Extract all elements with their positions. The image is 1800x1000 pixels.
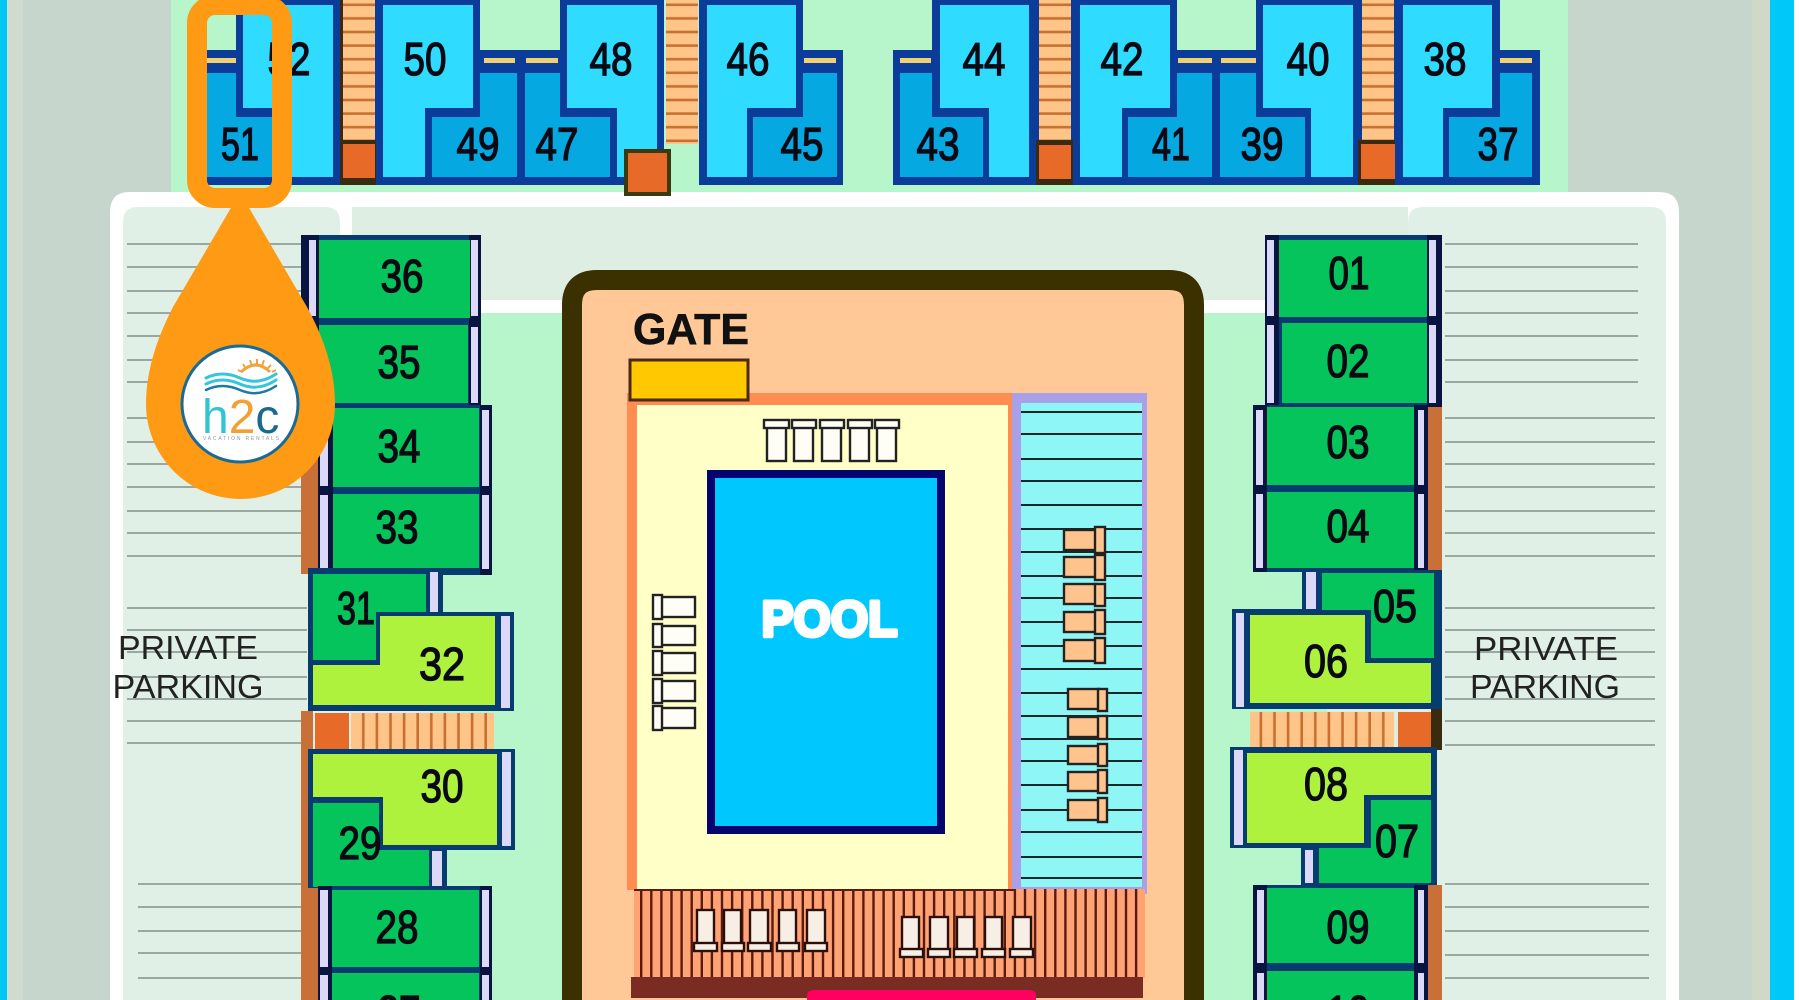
units 28 and 27 (301, 886, 492, 1000)
units 30 and 29 (301, 749, 515, 1000)
left column of units (301, 235, 515, 1000)
right loungers lower group (1068, 689, 1107, 822)
units 48 and 47: 48 (590, 33, 632, 85)
units 01 and 02: 01 (1328, 247, 1370, 299)
units 40 and 39: 40 (1286, 33, 1330, 85)
units 09 and 10 (1253, 885, 1442, 1000)
wordmark: h2c (202, 391, 279, 444)
gate label: GATE (633, 305, 749, 354)
units 34 and 33: 34 (378, 420, 420, 472)
units 08 and 07: 08 (1304, 758, 1348, 810)
units 28 and 27: 28 (376, 901, 418, 953)
units 36 and 35: 35 (378, 336, 420, 388)
units 52 and 51: 52 (268, 33, 310, 85)
units 32 and 31: 32 (419, 638, 465, 690)
units 08 and 07 (1230, 747, 1437, 885)
units 50 and 49: 50 (404, 33, 446, 85)
units 30 and 29: 29 (338, 817, 382, 869)
label: private parking left (112, 629, 264, 705)
location pin highlighting unit 51 (146, 5, 335, 499)
top loungers (764, 420, 899, 461)
pool enclosure (572, 280, 1194, 1000)
left parking area (123, 207, 352, 1000)
grounds with white kerb (110, 192, 1679, 1000)
units 40 and 39 (1216, 0, 1362, 185)
swimming pool: POOL (762, 591, 898, 647)
pool terrace (627, 393, 1019, 890)
left stair (301, 711, 494, 754)
units 42 and 41: 42 (1100, 33, 1144, 85)
units 36 and 35 (301, 235, 481, 407)
top row of units (192, 0, 1540, 194)
label: private parking right (1470, 630, 1620, 705)
units 09 and 10: 09 (1326, 901, 1370, 953)
h2c logo (182, 346, 298, 462)
left loungers (653, 595, 695, 730)
gate (630, 360, 748, 400)
units 38 and 37: 38 (1424, 33, 1466, 85)
units 32 and 31: 31 (337, 582, 375, 634)
sun (238, 359, 276, 372)
units 03 and 04: 03 (1326, 416, 1370, 468)
units 48 and 47 (518, 0, 664, 185)
upper lawn (171, 0, 1568, 194)
units 44 and 43: 44 (962, 33, 1006, 85)
units 01 and 02: 02 (1326, 335, 1370, 387)
units 01 and 02 (1265, 235, 1442, 407)
enclosure wall (572, 280, 1194, 1000)
units 06 and 05: 05 (1373, 580, 1417, 632)
units 06 and 05 (1232, 570, 1442, 709)
units 52 and 51 (192, 0, 340, 185)
units 46 and 45: 45 (780, 118, 824, 170)
units 38 and 37 (1395, 0, 1540, 185)
right parking area (1408, 207, 1666, 1000)
garden strips beside pool enclosure (430, 300, 1327, 1000)
stair 4 (1358, 0, 1403, 185)
units 32 and 31 (308, 568, 514, 711)
right loungers upper group (1064, 527, 1105, 663)
right column of units (1230, 235, 1442, 1000)
units 03 and 04: 04 (1326, 500, 1370, 552)
label: private parking left: PARKING (112, 668, 264, 705)
teardrop (146, 206, 335, 499)
units 42 and 41: 41 (1152, 118, 1190, 170)
units 34 and 33: 33 (376, 501, 418, 553)
shaded lounge deck (1012, 393, 1147, 894)
units 52 and 51: 51 (221, 118, 259, 170)
label: private parking left: PRIVATE (118, 629, 258, 666)
units 50 and 49 (376, 0, 525, 185)
timber deck (631, 889, 1145, 998)
right stair (1250, 709, 1442, 750)
deck loungers right group (900, 917, 1033, 957)
tagline: VACATION RENTALS (203, 436, 280, 442)
deck loungers left group (694, 910, 827, 951)
highlight ring (197, 5, 282, 198)
units 40 and 39: 39 (1240, 118, 1284, 170)
waves (206, 374, 276, 393)
pink entry marker (807, 990, 1036, 1000)
units 34 and 33 (301, 405, 492, 575)
label: private parking right: PARKING (1470, 668, 1620, 705)
units 50 and 49: 49 (456, 118, 500, 170)
units 46 and 45 (699, 0, 843, 185)
units 03 and 04 (1253, 405, 1442, 572)
units 42 and 41 (1073, 0, 1220, 185)
units 08 and 07: 07 (1375, 815, 1419, 867)
units 44 and 43 (893, 0, 1036, 185)
units 48 and 47: 47 (536, 118, 578, 170)
stair 1 (340, 0, 383, 185)
units 36 and 35: 36 (380, 250, 424, 302)
stair 2 (626, 0, 698, 194)
units 06 and 05: 06 (1304, 635, 1348, 687)
swimming pool (711, 474, 941, 830)
units 38 and 37: 37 (1478, 118, 1518, 170)
units 46 and 45: 46 (726, 33, 770, 85)
units 44 and 43: 43 (916, 118, 960, 170)
label: private parking right: PRIVATE (1474, 630, 1618, 667)
stair 3 (1036, 0, 1078, 185)
units 30 and 29: 30 (420, 760, 464, 812)
